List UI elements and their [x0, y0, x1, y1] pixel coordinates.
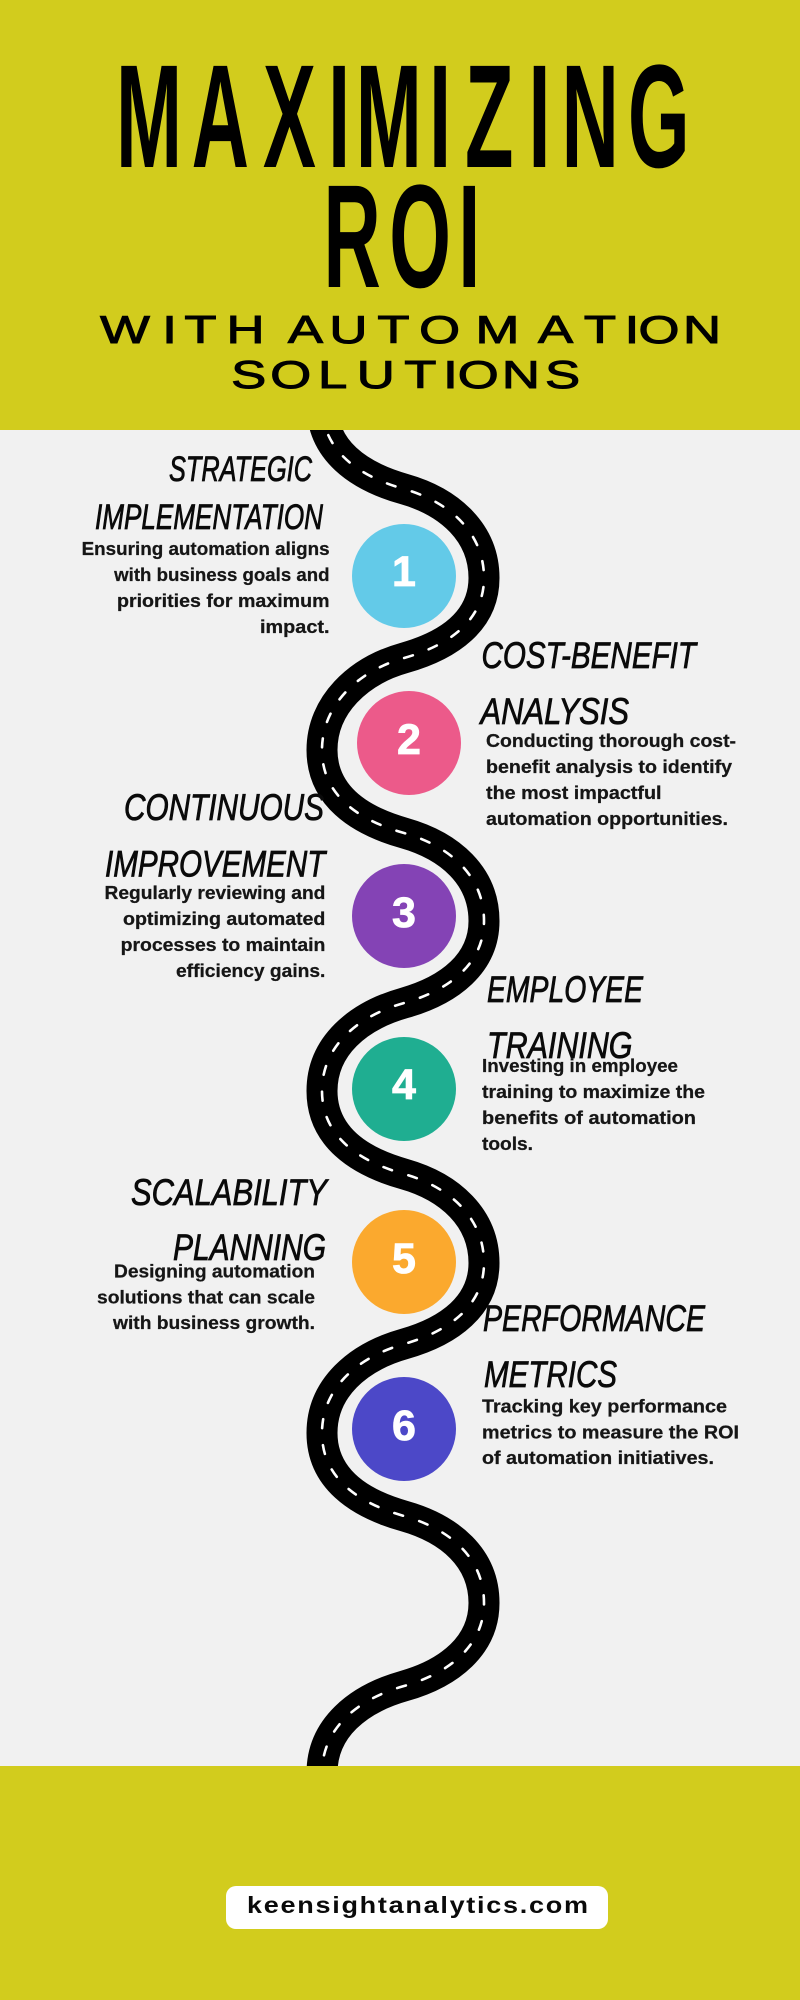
- step 1 number: 1: [392, 548, 416, 596]
- step 4 heading: TRAINING: [487, 1024, 632, 1066]
- subtitle: SOLUTIONS: [231, 353, 580, 396]
- step 5 description: with business growth.: [112, 1313, 315, 1333]
- step 1 heading: [95, 450, 324, 537]
- step 1 description: [82, 539, 330, 637]
- step 6 description: of automation initiatives.: [482, 1448, 714, 1468]
- title: [116, 35, 690, 319]
- step 2 description: automation opportunities.: [486, 809, 728, 829]
- step 2 number: 2: [397, 716, 421, 764]
- step 4 heading: [487, 968, 644, 1066]
- website pill: keensightanalytics.com: [247, 1893, 588, 1919]
- step 6 number: 6: [392, 1402, 416, 1450]
- step 4 description: Investing in employee: [482, 1056, 678, 1076]
- step 6: performance metrics: [352, 1297, 739, 1481]
- step 4 circle: [352, 1037, 456, 1141]
- step 3 heading: [105, 786, 328, 884]
- step 6 description: [482, 1396, 739, 1468]
- step 2 heading: [479, 634, 698, 732]
- step 4 description: benefits of automation: [482, 1108, 696, 1128]
- step 2: cost-benefit analysis: [357, 634, 736, 829]
- step 1 description: Ensuring automation aligns: [82, 539, 330, 559]
- subtitle: [100, 308, 721, 396]
- step 3 description: [104, 883, 325, 981]
- step 2 description: [486, 731, 736, 829]
- step 6 heading: PERFORMANCE: [483, 1297, 706, 1339]
- step 6 description: metrics to measure the ROI: [482, 1422, 739, 1442]
- step 3 description: processes to maintain: [121, 935, 325, 955]
- step 6 description: Tracking key performance: [482, 1396, 727, 1416]
- subtitle: WITH AUTOMATION: [100, 308, 721, 351]
- footer panel: [0, 1766, 800, 2000]
- step 5 description: solutions that can scale: [97, 1288, 315, 1308]
- step 6 circle: [352, 1377, 456, 1481]
- step 6 heading: METRICS: [484, 1353, 617, 1395]
- step 3 number: 3: [392, 889, 416, 937]
- step 1 heading: IMPLEMENTATION: [95, 498, 324, 537]
- step 3 description: Regularly reviewing and: [104, 883, 325, 903]
- step 6 heading: [483, 1297, 706, 1395]
- step 4 description: [482, 1056, 705, 1154]
- step 5: scalability planning: [97, 1171, 456, 1333]
- step 4 description: tools.: [482, 1134, 533, 1154]
- header panel: [0, 0, 800, 430]
- step 3 description: optimizing automated: [123, 909, 325, 929]
- step 1 heading: STRATEGIC: [169, 450, 313, 489]
- step 5 heading: [131, 1171, 329, 1268]
- step 3 circle: [352, 864, 456, 968]
- step 4 heading: EMPLOYEE: [487, 968, 644, 1010]
- step 5 heading: SCALABILITY: [131, 1171, 329, 1213]
- step 5 number: 5: [392, 1235, 416, 1283]
- title: ROI: [323, 155, 480, 319]
- step 2 heading: ANALYSIS: [479, 690, 629, 732]
- step 5 heading: PLANNING: [173, 1226, 326, 1268]
- step 3 heading: CONTINUOUS: [124, 786, 324, 828]
- step 2 description: the most impactful: [486, 783, 662, 803]
- step 1 description: impact.: [260, 617, 330, 637]
- step 3 heading: IMPROVEMENT: [105, 842, 328, 884]
- step 3: continuous improvement: [104, 786, 456, 981]
- title: MAXIMIZING: [116, 35, 690, 199]
- step 1 circle: [352, 524, 456, 628]
- step 4 description: training to maximize the: [482, 1082, 705, 1102]
- step 1: strategic implementation: [82, 450, 456, 637]
- step 5 description: Designing automation: [114, 1262, 315, 1282]
- step 2 circle: [357, 691, 461, 795]
- website pill: [226, 1886, 608, 1929]
- step 2 description: Conducting thorough cost-: [486, 731, 736, 751]
- step 3 description: efficiency gains.: [176, 961, 325, 981]
- step 2 heading: COST-BENEFIT: [482, 634, 698, 676]
- winding road: [322, 405, 484, 1773]
- step 5 circle: [352, 1210, 456, 1314]
- step 1 description: priorities for maximum: [117, 591, 330, 611]
- step 2 description: benefit analysis to identify: [486, 757, 732, 777]
- step 1 description: with business goals and: [113, 565, 330, 585]
- step 5 description: [97, 1262, 315, 1333]
- step 4 number: 4: [392, 1061, 416, 1109]
- step 4: employee training: [352, 968, 705, 1154]
